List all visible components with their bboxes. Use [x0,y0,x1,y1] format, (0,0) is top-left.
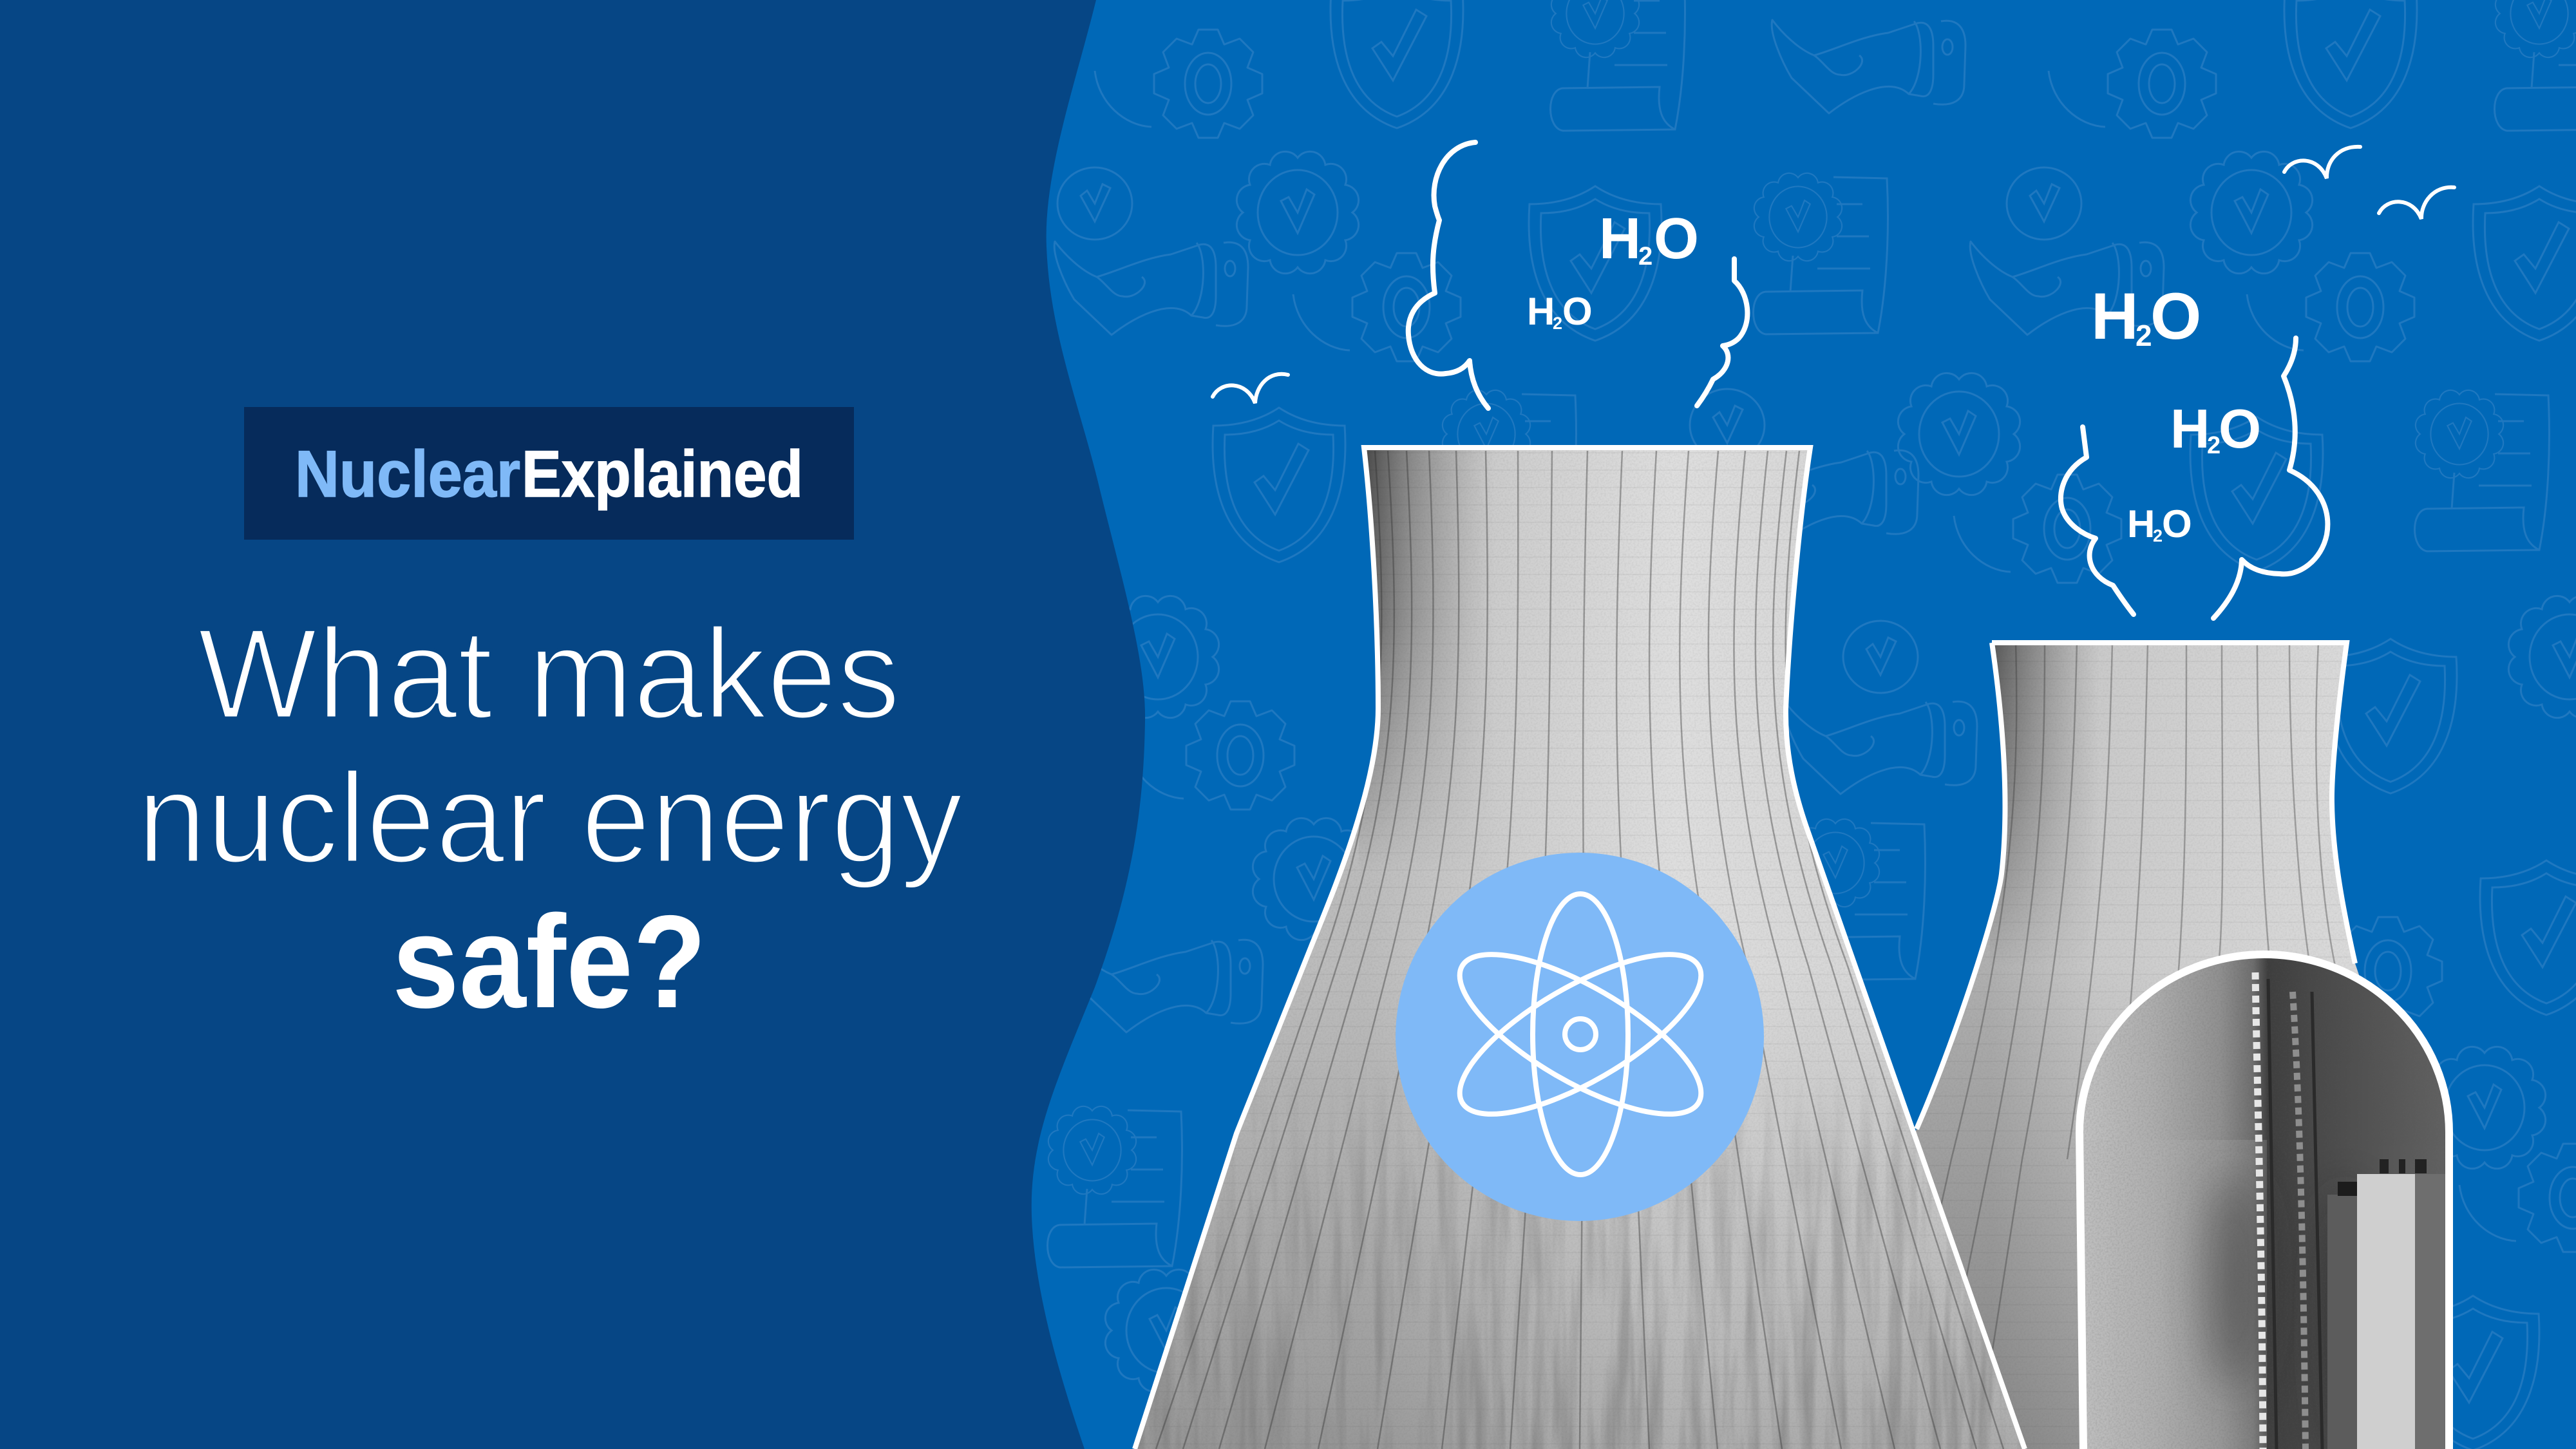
cloud: steam over large tower [1408,142,1747,408]
title: What makes [198,602,900,746]
title: nuclear energy [137,746,963,890]
reactor dome building [2074,947,2460,1449]
label: H2O large, tower one: O [1654,207,1699,271]
title [137,602,963,1036]
icon: atom on circle [1396,853,1764,1221]
label: H2O medium, tower two: O [2219,399,2261,460]
small cooling tower [1914,640,2360,1449]
label: H2O large, tower one: H [1599,207,1641,271]
large cooling tower [1095,444,2061,1449]
label: H2O small, tower two: H [2127,502,2155,545]
label: H2O large, tower two: 2 [2136,319,2152,352]
icon: bird far right [2379,187,2454,219]
badge: NuclearExplained [244,407,854,540]
label: H2O small, tower one: H [1527,290,1555,333]
label: H2O small, tower two: O [2162,502,2192,545]
label: H2O medium, tower two: 2 [2207,432,2221,459]
label: H2O small, tower one: 2 [1553,314,1562,333]
panel: dark blue wavy left [0,0,1145,1449]
label: H2O small, tower two: 2 [2153,526,2163,545]
label: H2O large, tower one: 2 [1638,242,1653,270]
label: H2O large, tower two: O [2150,279,2201,353]
title: safe? [392,888,706,1036]
badge: NuclearExplained: Nuclear [295,437,520,511]
label: H2O small, tower one: O [1562,290,1593,333]
badge: NuclearExplained: Explained [522,437,803,511]
icon: bird left [1213,374,1288,403]
cloud: steam over small tower [2061,338,2327,618]
label: H2O large, tower two: H [2091,279,2139,353]
icon: bird upper right [2284,147,2360,178]
label: H2O medium, tower two: H [2170,399,2210,460]
